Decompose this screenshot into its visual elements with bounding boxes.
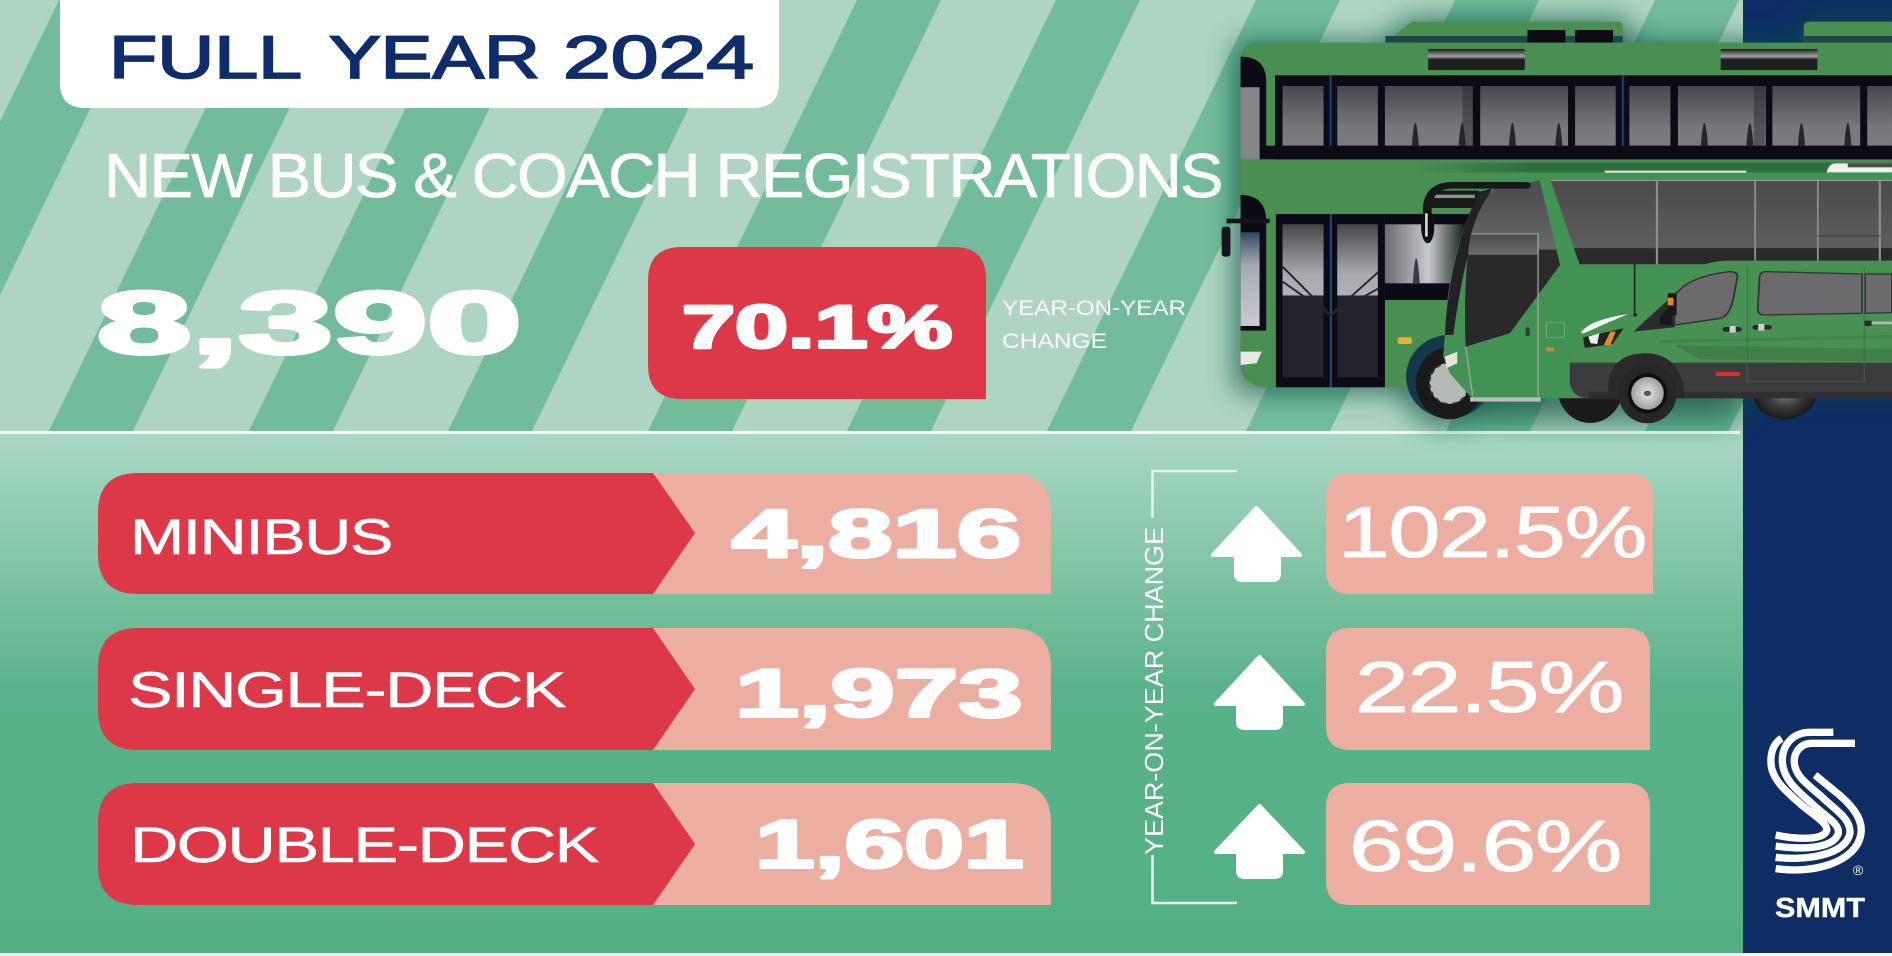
background: diagonal stripes bbox=[0, 0, 1892, 431]
lower sill bbox=[1570, 363, 1892, 398]
logo wordmark: SMMT bbox=[1775, 892, 1865, 923]
callout: single-deck change bbox=[1326, 628, 1650, 750]
side windows bbox=[1551, 179, 1892, 182]
van bbox=[1570, 257, 1892, 423]
callout: double-deck change bbox=[1326, 783, 1650, 905]
value: 4,816 bbox=[732, 496, 1021, 572]
label: MINIBUS bbox=[130, 509, 392, 565]
total registrations number: 8,390 bbox=[97, 274, 522, 372]
bar: minibus bbox=[98, 473, 1051, 594]
heading: new bus and coach registrations: NEW BUS & COACH REGISTRATIONS bbox=[104, 142, 1222, 211]
background: upper panel bbox=[0, 0, 1892, 431]
crease bbox=[1674, 345, 1892, 362]
coach body bbox=[1443, 172, 1892, 398]
soft shadow bbox=[1236, 20, 1892, 425]
left dark band bbox=[1445, 188, 1492, 335]
percentage: 102.5% bbox=[1338, 493, 1646, 573]
reflector bbox=[1715, 372, 1740, 376]
percentage text: 70.1% bbox=[682, 293, 952, 360]
windscreen bbox=[1633, 294, 1674, 332]
title tab bbox=[60, 0, 779, 108]
coach mirror bbox=[1427, 185, 1527, 213]
double-deck bus bbox=[1222, 22, 1892, 419]
icon: up arrow minibus bbox=[1213, 508, 1300, 580]
coach rear wheel bbox=[1557, 350, 1623, 423]
bracket and rotated label: year-on-year change bbox=[1139, 471, 1237, 903]
body bbox=[1241, 43, 1892, 387]
coach bbox=[1421, 163, 1892, 423]
seams bbox=[1747, 267, 1864, 382]
door window bbox=[1674, 272, 1738, 325]
icon: S mark bbox=[1771, 732, 1861, 870]
navy side panel bbox=[1743, 0, 1892, 953]
bus front wheel bbox=[1406, 335, 1493, 418]
caption: year-on-year change: YEAR-ON-YEAR bbox=[1002, 297, 1186, 320]
background: lower panel bbox=[0, 431, 1743, 953]
lights bbox=[1398, 337, 1412, 344]
roof details bbox=[1605, 171, 1746, 173]
windscreen bbox=[1465, 181, 1560, 347]
value: 1,601 bbox=[755, 807, 1024, 883]
title text bbox=[109, 24, 754, 91]
lower window bbox=[1385, 214, 1473, 300]
label: SINGLE-DECK bbox=[128, 662, 566, 718]
title text: 2024 bbox=[563, 24, 754, 91]
rotated label: YEAR-ON-YEAR CHANGE bbox=[1139, 527, 1169, 855]
headlight bbox=[1580, 314, 1628, 333]
title text: FULL bbox=[109, 24, 302, 91]
bar: single-deck bbox=[98, 628, 1051, 750]
handles bbox=[1722, 327, 1742, 332]
lower deck front bbox=[1241, 195, 1266, 331]
divider line bbox=[0, 431, 1740, 434]
door bbox=[1466, 295, 1538, 397]
upper window band bbox=[1275, 75, 1892, 159]
van body bbox=[1571, 261, 1892, 367]
illustration: vehicles bbox=[1222, 20, 1892, 425]
title text: YEAR bbox=[329, 24, 540, 91]
caption: year-on-year change bbox=[1002, 297, 1186, 353]
side mirror bbox=[1660, 293, 1677, 325]
label: DOUBLE-DECK bbox=[130, 817, 599, 873]
side windows bbox=[1758, 272, 1862, 315]
doors bbox=[1276, 214, 1385, 387]
percentage: 69.6% bbox=[1349, 807, 1621, 887]
van front wheel bbox=[1618, 363, 1677, 423]
wheel arch bbox=[1608, 353, 1685, 398]
roof pods bbox=[1385, 22, 1623, 43]
value: 1,973 bbox=[735, 656, 1022, 732]
percentage: 22.5% bbox=[1355, 648, 1623, 728]
callout: minibus change bbox=[1326, 473, 1653, 594]
van rear wheel bbox=[1753, 367, 1816, 419]
SMMT logo bbox=[1771, 732, 1865, 923]
registered mark: ® bbox=[1853, 862, 1864, 878]
bar: double-deck bbox=[98, 783, 1051, 905]
icon: up arrow single-deck bbox=[1216, 657, 1303, 728]
caption: year-on-year change: CHANGE bbox=[1002, 330, 1107, 353]
antenna bbox=[1633, 257, 1637, 317]
callout: total percentage change bbox=[648, 247, 986, 399]
icon: up arrow double-deck bbox=[1216, 806, 1303, 877]
coach mirror shade bbox=[1430, 191, 1479, 208]
